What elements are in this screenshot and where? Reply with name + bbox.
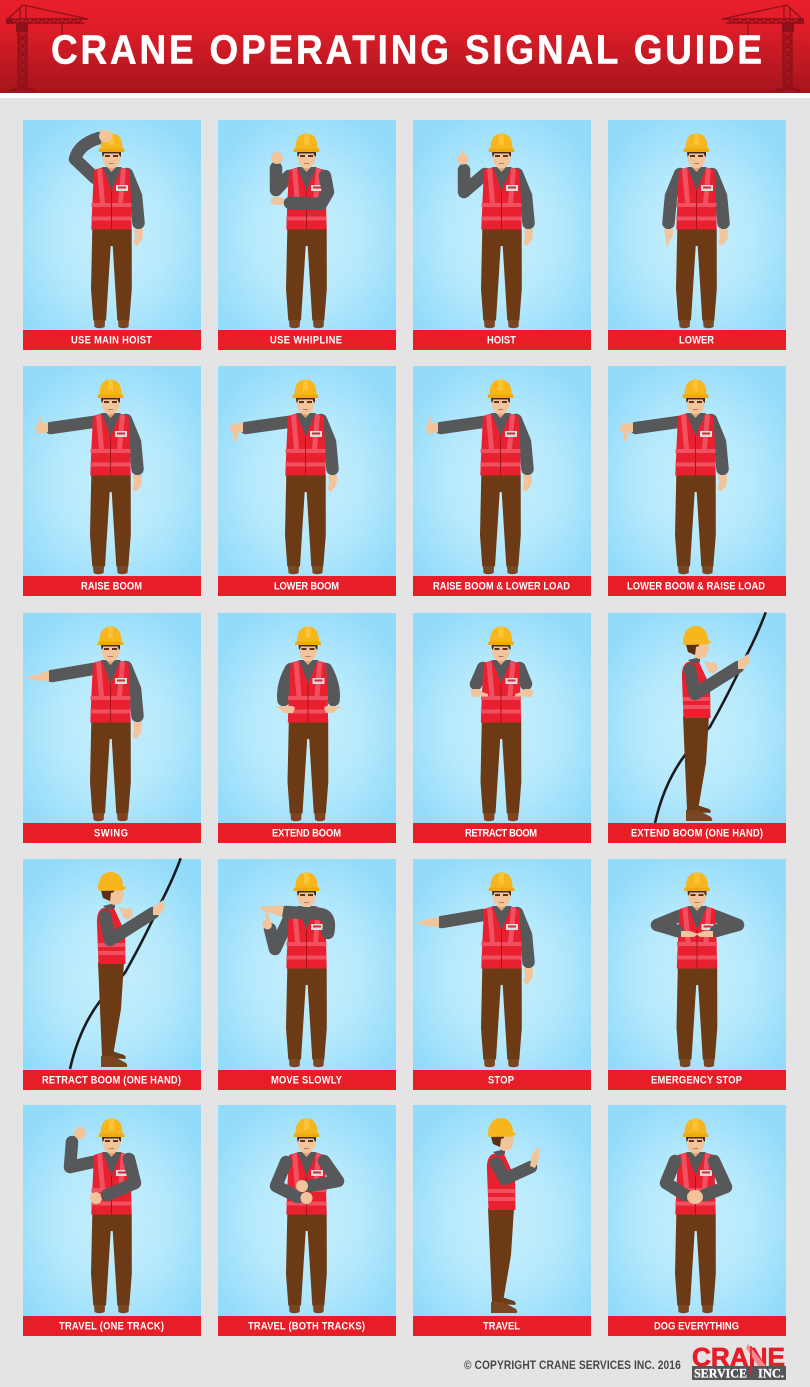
logo: crane service inc: SERVICE	[694, 1366, 747, 1380]
panel: hoist: HOIST	[487, 335, 517, 347]
panel: dog everything: DOG EVERYTHING	[654, 1321, 739, 1333]
panel: extend boom	[218, 613, 396, 843]
panel: travel: TRAVEL	[483, 1321, 520, 1333]
panel: hoist	[413, 120, 591, 350]
panel: extend boom one hand: EXTEND BOOM (ONE HAND)	[631, 828, 763, 840]
panel: raise boom	[23, 366, 201, 596]
copyright line: © COPYRIGHT CRANE SERVICES INC. 2016	[464, 1359, 681, 1372]
panel: retract boom one hand: RETRACT BOOM (ONE HAND)	[42, 1075, 181, 1087]
panel: retract boom one hand	[23, 858, 201, 1090]
panel: swing: SWING	[94, 828, 128, 840]
panel: swing	[23, 613, 201, 843]
panel: move slowly	[218, 859, 396, 1090]
panel: lower boom and raise load: LOWER BOOM & RAISE LOAD	[627, 581, 765, 593]
panel: stop: STOP	[488, 1075, 514, 1087]
panel: travel both tracks	[218, 1105, 396, 1336]
panel: travel	[413, 1105, 591, 1336]
panel: use whipline	[218, 120, 396, 350]
header banner: CRANE OPERATING SIGNAL GUIDE	[51, 28, 762, 73]
panel: raise boom and lower load: RAISE BOOM & LOWER LOAD	[433, 581, 570, 593]
panel: raise boom: RAISE BOOM	[81, 581, 142, 593]
header banner	[0, 0, 810, 98]
panel: lower boom	[218, 366, 396, 596]
panel: stop	[413, 859, 591, 1090]
panel: retract boom: RETRACT BOOM	[465, 828, 537, 840]
panel: retract boom	[413, 613, 591, 843]
panel: travel one track	[23, 1105, 201, 1336]
panel: lower: LOWER	[679, 335, 715, 347]
panel: travel both tracks: TRAVEL (BOTH TRACKS)	[248, 1321, 365, 1333]
panel: emergency stop: EMERGENCY STOP	[651, 1075, 742, 1087]
logo: crane service inc: CRANE	[692, 1342, 785, 1372]
panel: lower	[608, 120, 786, 350]
panel: use whipline: USE WHIPLINE	[270, 335, 342, 347]
panel: move slowly: MOVE SLOWLY	[271, 1075, 342, 1087]
panel: emergency stop	[608, 859, 786, 1090]
panel: lower boom: LOWER BOOM	[274, 581, 339, 593]
panel: dog everything	[608, 1105, 786, 1336]
panel: use main hoist	[23, 120, 201, 350]
panel: travel one track: TRAVEL (ONE TRACK)	[59, 1321, 164, 1333]
panel: lower boom and raise load	[608, 366, 786, 596]
panel: extend boom: EXTEND BOOM	[272, 828, 341, 840]
panel: raise boom and lower load	[413, 366, 591, 596]
panel: extend boom one hand	[608, 612, 786, 843]
panel: use main hoist: USE MAIN HOIST	[71, 335, 153, 347]
logo: crane service inc: INC.	[758, 1366, 784, 1380]
